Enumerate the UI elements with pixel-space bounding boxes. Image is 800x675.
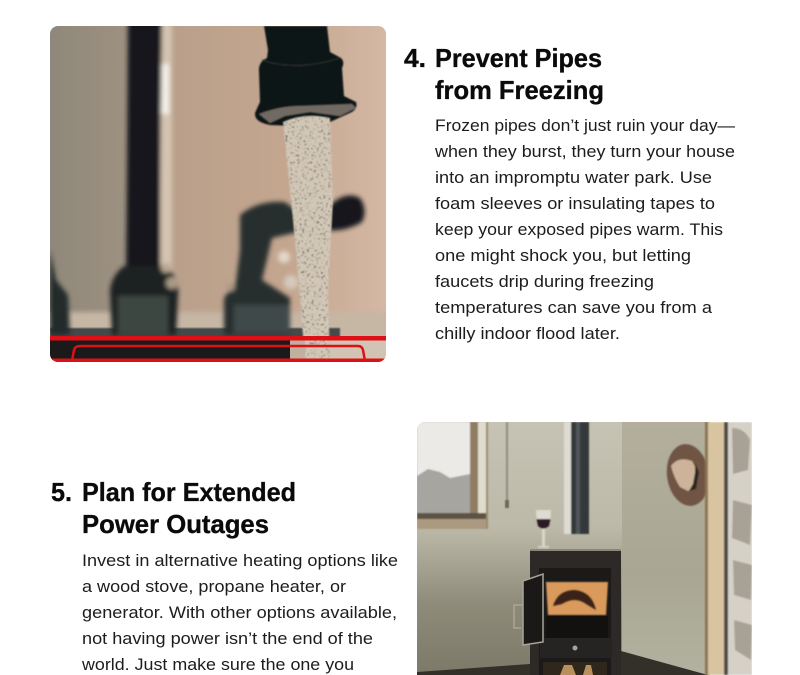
window <box>417 422 488 529</box>
red lines <box>50 340 290 360</box>
text block: step 5 body: a wood stove, propane heater, or <box>82 578 347 596</box>
hat <box>666 443 706 507</box>
text block: step 4 body <box>434 117 736 343</box>
blurred handle <box>224 195 365 335</box>
heading: step 5: Plan for Extended <box>82 477 296 507</box>
heading: step 4: Prevent Pipes <box>435 43 602 73</box>
text block: step 5 body: generator. With other options available, <box>82 604 397 622</box>
open stove door <box>514 574 543 645</box>
text block: step 4 body: keep your exposed pipes warm. This <box>435 221 723 239</box>
blurred faucet post <box>50 20 178 335</box>
text block: step 5 body: not having power isn’t the end of the <box>82 630 373 648</box>
text block: step 4 body: foam sleeves or insulating tapes to <box>435 195 715 213</box>
text block: step 4 body: into an impromptu water park. Use <box>435 169 712 187</box>
text block: step 4 body: one might shock you, but letting <box>435 247 691 265</box>
text block: step 4 body: chilly indoor flood later. <box>435 325 620 343</box>
photo: running faucet <box>40 20 396 362</box>
heading: step 5: Power Outages <box>82 509 269 539</box>
heading: step 4: 4. <box>404 43 426 73</box>
text block: step 4 body: faucets drip during freezing <box>435 273 654 291</box>
text block: step 4 body: temperatures can save you from a <box>435 299 713 317</box>
pull cord <box>505 422 509 508</box>
stove pipe <box>564 422 589 534</box>
door frame and stone wall <box>705 422 752 675</box>
floor <box>417 651 708 675</box>
text block: step 5 body: Invest in alternative heating options like <box>82 552 398 570</box>
heading: step 4 <box>404 43 604 105</box>
text block: step 4 body: Frozen pipes don’t just ruin your day— <box>435 117 736 135</box>
text block: step 5 body: world. Just make sure the one you <box>81 656 354 674</box>
text block: step 5 body <box>81 552 398 674</box>
text block: step 4 body: when they burst, they turn your house <box>434 143 735 161</box>
spout head <box>255 26 356 126</box>
water stream <box>283 116 333 362</box>
heading: step 4: from Freezing <box>435 75 604 105</box>
stove <box>530 549 621 675</box>
heading: step 5: 5. <box>51 477 72 507</box>
photo: wood stove <box>417 422 752 675</box>
heading: step 5 <box>51 477 296 539</box>
wine glass <box>536 510 551 548</box>
